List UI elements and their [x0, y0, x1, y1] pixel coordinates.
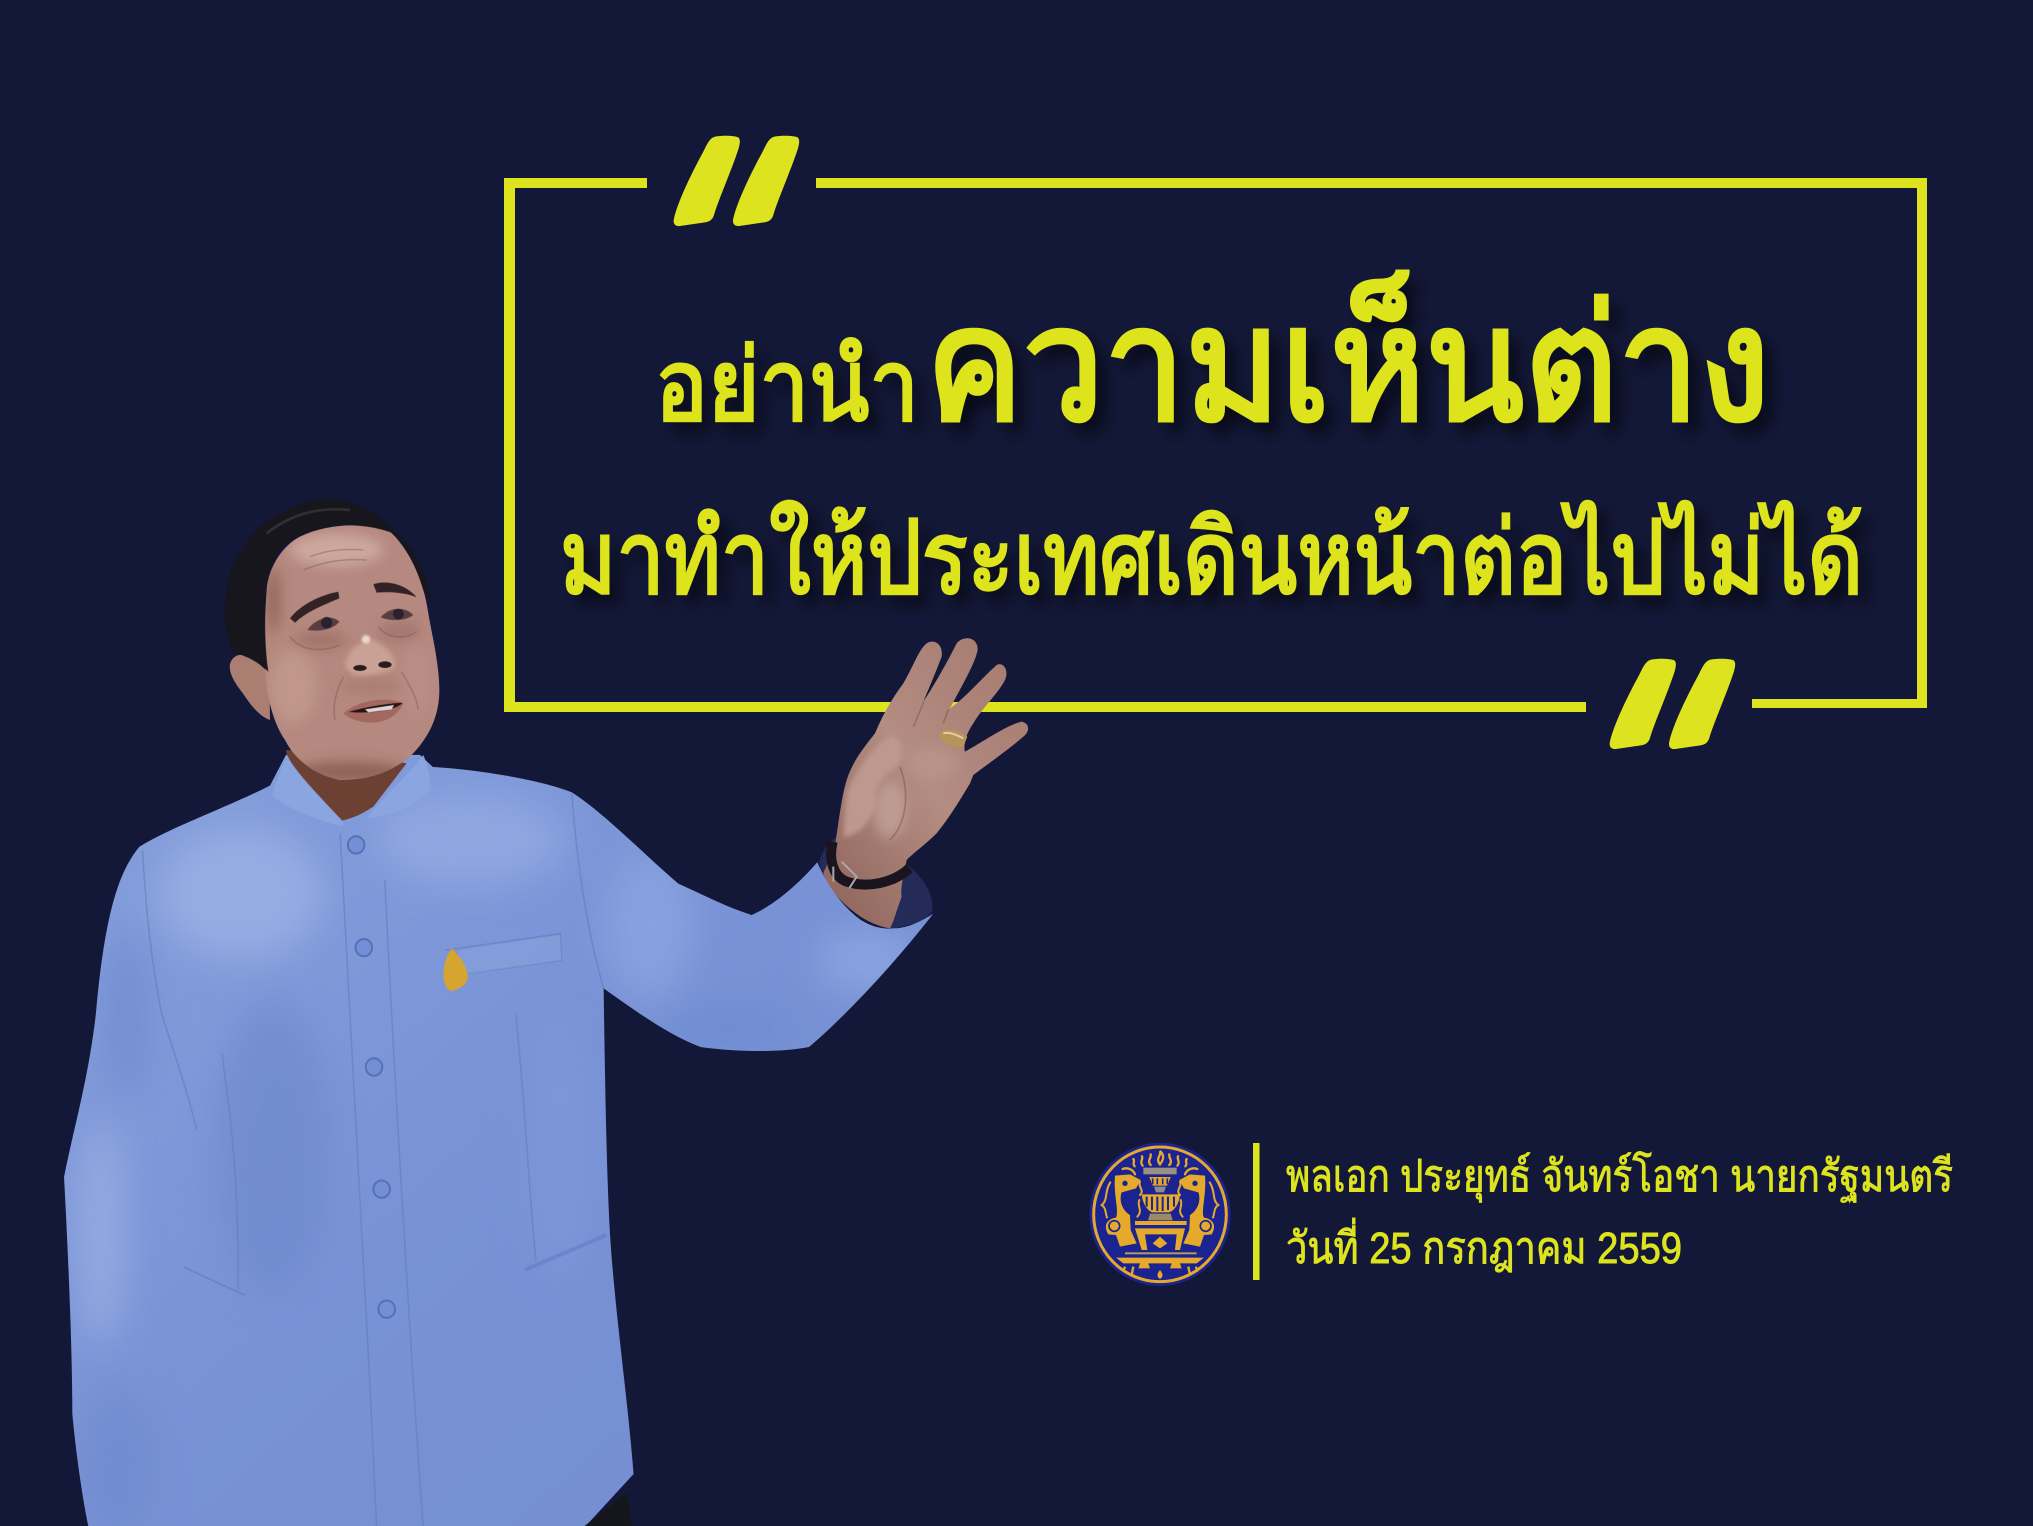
government seal: [1089, 1143, 1231, 1286]
eyes: [307, 618, 339, 631]
hair sheen: [267, 509, 350, 533]
opening quotation mark: [674, 136, 799, 226]
seal: flame crown: [1123, 1151, 1197, 1174]
attribution date: วันที่ 25 กรกฎาคม 2559: [1286, 1217, 1682, 1273]
seal: pedestal: [1125, 1221, 1197, 1254]
neck: [286, 750, 407, 821]
attribution divider: [1253, 1143, 1260, 1280]
inner cuff: [883, 865, 932, 930]
closing quotation mark: [1610, 659, 1735, 749]
watch: [831, 842, 909, 885]
seal: urn: [1142, 1168, 1180, 1220]
raised hand: [819, 638, 1028, 930]
buttons: [348, 836, 395, 1318]
seal: side ornaments: [1137, 1182, 1183, 1217]
headline line 1: ความเห็นต่าง: [926, 269, 1770, 454]
seal: right lion: [1179, 1174, 1218, 1247]
photo: speaker in blue jacket: [64, 498, 1028, 1526]
hand and fingers: [823, 638, 1028, 928]
seal: base panel: [1116, 1258, 1204, 1279]
quote frame: [504, 178, 1927, 712]
eyebrows: [290, 592, 339, 623]
nose: [345, 640, 395, 675]
wrinkles: [290, 549, 418, 720]
ring: [939, 730, 967, 748]
headline line 1: อย่านำ: [655, 330, 919, 442]
hair: [225, 498, 432, 672]
collar: [273, 755, 343, 826]
mouth: [343, 700, 403, 723]
seams and pockets: [142, 794, 606, 1526]
jacket shading: [76, 794, 917, 1526]
head: [225, 498, 447, 826]
seal: left lion: [1102, 1174, 1141, 1247]
headline line 1: [655, 269, 1770, 454]
thumb and palm shading: [843, 735, 902, 837]
ear: [230, 655, 270, 720]
badge: [444, 948, 468, 991]
trousers: [584, 1493, 632, 1526]
face: [264, 525, 440, 780]
jacket: [64, 755, 933, 1526]
finger gaps shadow: [890, 702, 948, 840]
